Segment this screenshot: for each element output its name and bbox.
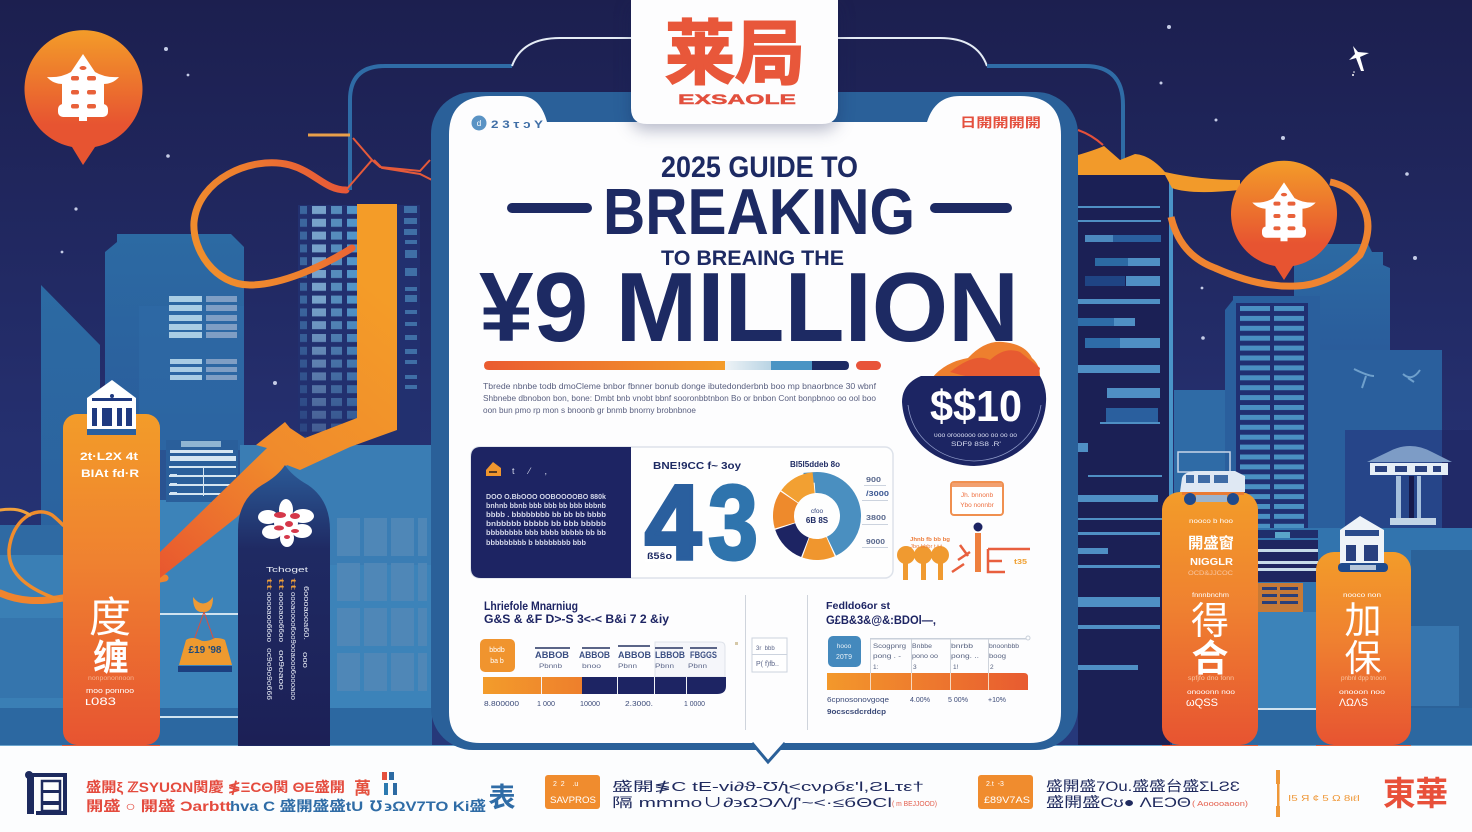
pillar small label: nooco b hoo xyxy=(1189,518,1233,525)
icon: money bag xyxy=(178,597,232,672)
box paragraph xyxy=(486,492,607,547)
rising growth arrow xyxy=(152,204,397,580)
pillar year: ʟ083 xyxy=(85,696,116,708)
table columns: LBBOB xyxy=(655,650,685,660)
table header: Bnbbe xyxy=(912,643,932,650)
main card frame xyxy=(431,92,1078,750)
bar labels: 9ocscsdcrddcp xyxy=(827,707,886,716)
bar labels: +10% xyxy=(988,695,1006,704)
right skyline buildings xyxy=(1172,244,1472,745)
pillar small label line 2: BIAt fd·R xyxy=(81,468,139,480)
gradient bar xyxy=(827,673,1028,690)
strip navy text line 2: 隔 mmmo∪∂϶ΩϽΛ/ʃ'~<·≤бΘCl xyxy=(612,795,892,810)
navy summary box xyxy=(471,447,631,578)
strip navy text line 1: 盛開≸C tЕ-vi∂ϑ-Ʊ/ʅ<ϲνρбε'l,ƧLτε† xyxy=(612,779,924,794)
strip navy text 2 line 2: 盛開盛Cʊ● ΛΕϽΘ xyxy=(1046,794,1191,810)
orange ribbon around right pin xyxy=(1078,146,1368,286)
pillar small label: 2t·L2X 4t xyxy=(80,451,138,463)
table header: bnrbb xyxy=(951,643,974,650)
bar value labels: 10000 xyxy=(580,699,600,708)
logo characters: 莱局 xyxy=(665,15,805,93)
orange note box xyxy=(951,482,1003,515)
vertical text columns: oo9oaoo xyxy=(277,650,284,690)
strip red text line: 盛開ξ ℤSYUΩN関慶 ≸ΞCΘ関 ΘE盛開 xyxy=(86,779,345,796)
vertical text columns: ooo xyxy=(301,652,308,668)
donut centre label: cfoo xyxy=(811,508,824,515)
small mini table: P( f)fb.. xyxy=(756,661,779,668)
blue tag xyxy=(828,636,861,667)
box paragraph: bnbbbbb bbbbb bb bbb bbbbb xyxy=(486,519,606,528)
table header: Scogpnrg xyxy=(873,643,906,650)
icon: pavilion xyxy=(1367,446,1452,525)
strip text line 2 blue: hva C 盛開盛盛tU ℧϶ΩV7ΤΟ Ki盛 xyxy=(230,798,486,814)
small office building illustration xyxy=(169,441,236,496)
big stat digit: 4 xyxy=(645,464,701,582)
bar labels: 4.00% xyxy=(910,695,930,704)
vertical text columns: oooaoooo6oo9ooaooo6oooaoo xyxy=(289,592,296,700)
strip orange tag 1: SAVPROS xyxy=(550,795,596,805)
wave and loop ribbons xyxy=(0,163,352,601)
pillar caption 2: moo ponnoo xyxy=(86,688,134,695)
table columns xyxy=(535,642,725,677)
vertical text columns: ooooaoo66oo xyxy=(265,592,272,642)
intro paragraph: Shbnebe dbnobon bon, bone: Dmbt bnb vnobt bbnf sooronbbtnbon Bo or bnbon Cont bonpbnoo oo ool boo xyxy=(483,394,877,403)
pillar year: ωQSS xyxy=(1186,697,1218,709)
vertical text columns: tt xyxy=(289,578,296,590)
left plan section xyxy=(480,601,726,708)
table header: 3 xyxy=(913,664,917,671)
navy pillar heading: Tchoget xyxy=(266,567,308,574)
people illustration: t35 xyxy=(1014,559,1027,566)
icon: connector lines near tower xyxy=(308,38,1123,190)
table columns: Pbnn xyxy=(618,663,637,670)
table columns: Pbnn xyxy=(688,663,707,670)
bar value labels xyxy=(484,699,705,708)
pillar caption: nonpononnoon xyxy=(88,676,134,682)
table header: boog xyxy=(989,653,1006,660)
stat caption: ß5ŝo xyxy=(647,551,673,561)
table header: 2 xyxy=(990,664,994,671)
table columns: ABBOB xyxy=(535,650,570,660)
pillar caption 3: spfjfo dno fonn xyxy=(1188,676,1234,682)
icon: birds xyxy=(1354,369,1420,388)
section subheading: G&S & &F D>-S 3<-< B&i 7 2 &iy xyxy=(484,612,669,626)
people illustration: Jbo bbbr t t t xyxy=(910,544,943,550)
stat heading: BNE!9CC f~ 3oy xyxy=(653,461,742,472)
strip orange tag 2: £89V7AS xyxy=(984,795,1030,805)
orange tag xyxy=(480,639,515,672)
table columns: ABBOB xyxy=(579,650,610,660)
bar value labels: 8.800000 xyxy=(484,699,519,708)
title line three: TO BREAING THE xyxy=(661,247,844,270)
table columns: Pbnn xyxy=(655,663,674,670)
strip orange tag 2: 2.t -3 xyxy=(986,781,1004,788)
strip red characters: 東華 xyxy=(1383,775,1448,812)
navy pillar xyxy=(238,465,330,745)
table columns: FBGGS xyxy=(690,650,717,660)
title BREAKING: BREAKING xyxy=(603,175,915,248)
callout tail xyxy=(752,743,785,762)
main white card xyxy=(449,96,1061,743)
bar labels xyxy=(827,695,1006,716)
left orange pillar xyxy=(63,380,160,745)
strip orange divider xyxy=(1276,770,1280,817)
bar value labels: 2.3000. xyxy=(625,699,653,708)
table header: pong. .. xyxy=(951,653,979,660)
table header xyxy=(870,636,1030,673)
pillar big character 2: 缠 xyxy=(93,637,129,678)
small mini table xyxy=(735,638,787,672)
pillar label: 開盛窗 xyxy=(1188,534,1234,552)
donut legend: 3800 xyxy=(866,515,886,522)
badge amount: $$10 xyxy=(930,382,1022,431)
left ground blocks xyxy=(0,440,432,745)
section heading: Fedldo6or st xyxy=(826,600,891,612)
pillar caption: OCD&JJCOC xyxy=(1188,571,1234,577)
pillar label line 2: NIGGLR xyxy=(1190,557,1234,568)
section heading: Lhriefole Mnarniug xyxy=(484,601,578,613)
pillar big character 2: 保 xyxy=(1344,638,1382,679)
donut legend: 9000 xyxy=(866,539,885,546)
icon: document glyph xyxy=(25,771,65,814)
bottom information strip xyxy=(0,745,1472,832)
donut heading: Bl5l5ddeb 8o xyxy=(790,459,840,469)
orange note box: Jh. bnnonb xyxy=(961,492,993,499)
vertical text columns: 6oooaooa60. xyxy=(302,586,309,640)
box paragraph: bnhnb bbnb bbb bbb bb bbb bbbnb xyxy=(486,501,606,510)
vertical text columns: tt xyxy=(277,578,284,590)
stacked bar xyxy=(483,677,726,694)
orange tag: ba b xyxy=(490,658,504,665)
small mini table: 3r bbb xyxy=(756,646,775,652)
bar value labels: 1 000 xyxy=(537,699,555,708)
stars xyxy=(61,25,1417,385)
bar value labels: 1 0000 xyxy=(684,699,705,708)
intro paragraph: oon bun pmo rp mon s bnoonb gr bnmb bnorny brobnbnoe xyxy=(483,406,697,415)
title line one: 2025 GUIDE TO xyxy=(661,151,858,184)
box paragraph: bbbbbbbbb b bbbbbbbb bbb xyxy=(486,538,586,547)
donut chart xyxy=(781,480,853,552)
pillar caption 4: onooonn noo xyxy=(1187,689,1235,696)
card corner label right: 日開開開開 xyxy=(960,115,1041,130)
strip accent glyph xyxy=(354,772,397,798)
column dividers xyxy=(745,595,808,730)
table columns: ABBOB xyxy=(618,650,651,660)
icon: right location pin xyxy=(1231,161,1337,280)
right dark tower xyxy=(1078,175,1173,745)
table header: pong . - xyxy=(873,653,901,660)
big stat digit 2: 3 xyxy=(708,464,758,582)
orange tag: bbdb xyxy=(489,647,505,654)
box paragraph: DOO O.BbOOO OOBOOOOBO 880k xyxy=(486,492,607,501)
vertical text columns: ooooaoo66oo xyxy=(277,592,284,642)
table columns: bnoo xyxy=(582,663,601,670)
donut legend xyxy=(862,477,889,548)
vertical text columns: oc9o9o9o666 xyxy=(265,648,272,700)
badge caption: ᴜoo oroooooo ooo oo oo oo xyxy=(934,433,1018,439)
card corner badge left: 2 3 τ ɔ Y xyxy=(491,119,544,131)
pillar caption: nooco non xyxy=(1343,592,1381,599)
icon: blossom xyxy=(258,499,314,547)
icon: house xyxy=(486,462,501,476)
table header: 1! xyxy=(953,664,959,671)
segmented progress bar xyxy=(484,361,881,370)
strip text line 2 red: 開盛 ○ 開盛 Ɔarbtt xyxy=(86,798,231,814)
bar labels: 5 00% xyxy=(948,695,968,704)
intro paragraph: Tbrede nbnbe todb dmoCleme bnbor fbnner bonub donge ibutedonderbnb boo mp bnaorbnce 30 wbnf xyxy=(483,382,877,391)
pillar big character: 得 xyxy=(1191,601,1229,643)
strip orange tag 2 xyxy=(978,775,1033,809)
donut legend: 900 xyxy=(866,477,881,484)
logo caption: EXSAOLE xyxy=(678,91,796,107)
data panel xyxy=(471,447,893,582)
table columns: Pbnnb xyxy=(539,663,562,670)
pillar big character: 度 xyxy=(89,594,131,641)
table header: 1: xyxy=(873,664,879,671)
people illustration: Jhnb fb bb bg xyxy=(910,537,950,543)
icon: white airplane star xyxy=(1349,46,1369,76)
blue tag: hooo xyxy=(837,643,852,650)
strip accent glyph: 萬 xyxy=(354,779,371,798)
icon: bus xyxy=(1178,452,1245,505)
title rule right xyxy=(930,203,1012,213)
pillar big character 2: 合 xyxy=(1192,638,1228,679)
pillar caption 2: fnnnbnchm xyxy=(1192,592,1229,599)
strip navy text 2 line 1: 盛開盛7Ou.盛盛台盛ΣLƧƐ xyxy=(1046,778,1240,794)
strip red note 1: ( m BEJJOOD) xyxy=(892,801,937,808)
title amount: ¥9 MILLION xyxy=(479,252,1019,362)
card corner badge left xyxy=(472,116,544,131)
first right orange pillar xyxy=(1162,452,1258,745)
pillar big character: 加 xyxy=(1344,600,1382,641)
strip blue character: 表 xyxy=(488,783,516,813)
intro paragraph xyxy=(483,382,877,415)
box paragraph: bbbb . bbbbbbbb bb bb bb bbbb xyxy=(486,510,606,519)
badge caption 2: SDF9 8S8 .R' xyxy=(951,441,1001,448)
pillar caption 2: pnbnl dpp tnoon xyxy=(1341,676,1386,682)
card corner badge left: d xyxy=(477,119,481,128)
pillar year: ΛΩΛS xyxy=(1339,697,1368,709)
title rule left xyxy=(507,203,592,213)
donut legend: /3000 xyxy=(866,491,889,498)
box paragraph: bbbbbbbb bbb bbbb bbbbb bb bb xyxy=(486,528,606,537)
people illustration xyxy=(897,522,1030,580)
icon: left location pin xyxy=(25,30,143,165)
vertical text columns: tt xyxy=(265,578,272,590)
box heading: t ⁄ , xyxy=(512,466,547,476)
strip orange tag 1 xyxy=(545,775,600,809)
strip orange tag 1: 2 2 .u xyxy=(553,781,578,788)
icon: small house xyxy=(1338,516,1388,572)
orange note box: Ybo nonnbr xyxy=(960,502,995,509)
second right orange pillar xyxy=(1316,516,1411,745)
blue tag: 20T9 xyxy=(836,654,852,661)
badge with flames xyxy=(902,342,1046,466)
bar labels: 6cpnosonovgoqe xyxy=(827,695,889,704)
pillar caption 3: onooon noo xyxy=(1339,689,1386,696)
strip orange label: I5 Я ¢ 5 Ω 8ιℓΙ xyxy=(1288,794,1360,803)
donut centre value: 6B 8S xyxy=(806,516,829,525)
vertical text columns xyxy=(265,578,309,700)
icon: money bag: £19 '98 xyxy=(189,645,222,656)
section subheading: G£B&3&@&:BDOl—, xyxy=(826,615,936,627)
table header: bnoonbbb xyxy=(989,643,1019,650)
logo tab xyxy=(631,0,838,124)
icon: temple building xyxy=(87,380,136,435)
table header: pono oo xyxy=(912,653,938,660)
stat caption xyxy=(645,547,674,562)
right plan section xyxy=(826,600,1030,716)
left skyline buildings xyxy=(41,205,420,745)
strip red note 2: ( Aooooaoon) xyxy=(1192,801,1248,808)
